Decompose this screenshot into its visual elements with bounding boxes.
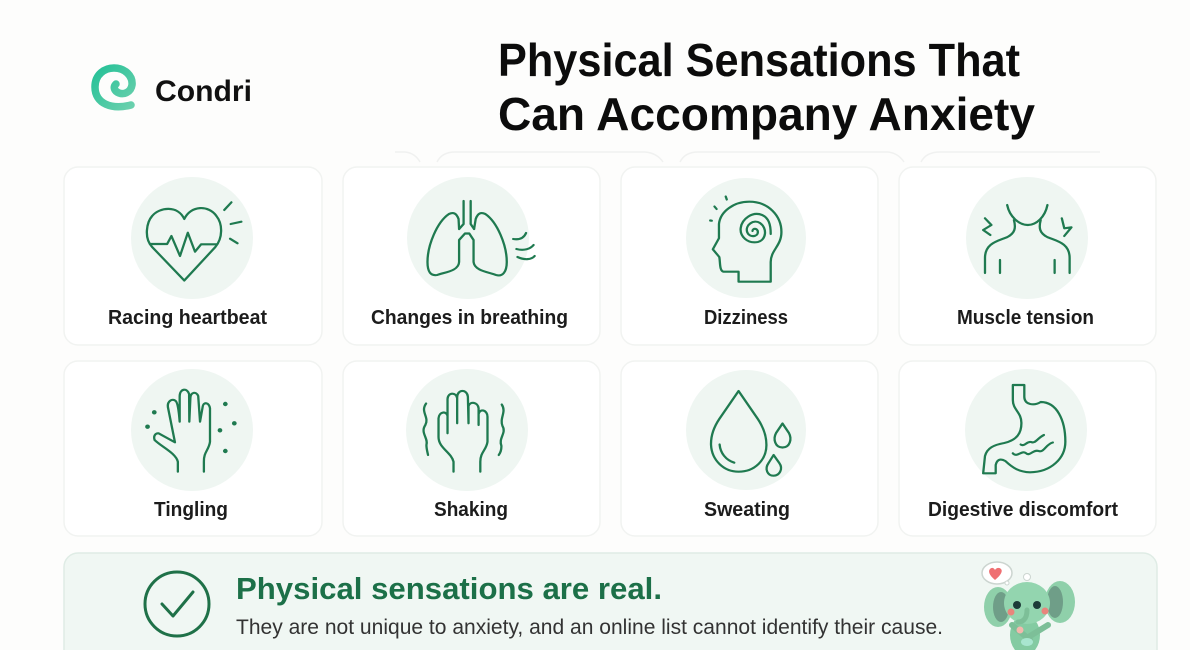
icon: elephant mascot [982,562,1075,650]
panel: dizziness: Dizziness [704,307,788,329]
callout heading: Physical sensations are real. [236,571,662,606]
icon: shoulders and neck [983,205,1071,273]
panel: tingling [64,361,322,536]
callout: physical sensations are real [64,553,1157,650]
icon: sweat drops [711,391,790,476]
title: Can Accompany Anxiety [498,88,1035,140]
icon: lungs [427,201,535,275]
panel: changes in breathing [343,167,600,345]
panel: racing heartbeat: Racing heartbeat [108,307,267,329]
panel: tingling: Tingling [154,499,228,521]
icon: shaking hand [424,391,504,472]
panel: digestive discomfort: Digestive discomfort [928,499,1118,521]
icon: tingling dots [145,402,237,453]
panel: racing heartbeat [64,167,322,345]
icon: head with spiral [710,196,781,282]
logo: Condri [95,68,252,108]
title [498,34,1035,140]
panel: muscle tension: Muscle tension [957,307,1094,329]
logo: Condri: Condri [155,75,252,108]
title: Physical Sensations That [498,34,1020,86]
panel: changes in breathing: Changes in breathing [371,307,568,329]
icon: hand [154,390,210,472]
panel: shaking [343,361,600,536]
panel: shaking: Shaking [434,499,508,521]
icon: heart with pulse [147,202,241,280]
panel: sweating: Sweating [704,499,790,521]
panel: sweating [621,361,878,536]
panel: muscle tension [899,167,1156,345]
panel: digestive discomfort [899,361,1156,536]
icon: check mark in circle [145,572,209,636]
callout text: They are not unique to anxiety, and an online list cannot identify their cause. [236,616,943,639]
panel: dizziness [621,167,878,345]
icon: stomach [983,385,1065,473]
